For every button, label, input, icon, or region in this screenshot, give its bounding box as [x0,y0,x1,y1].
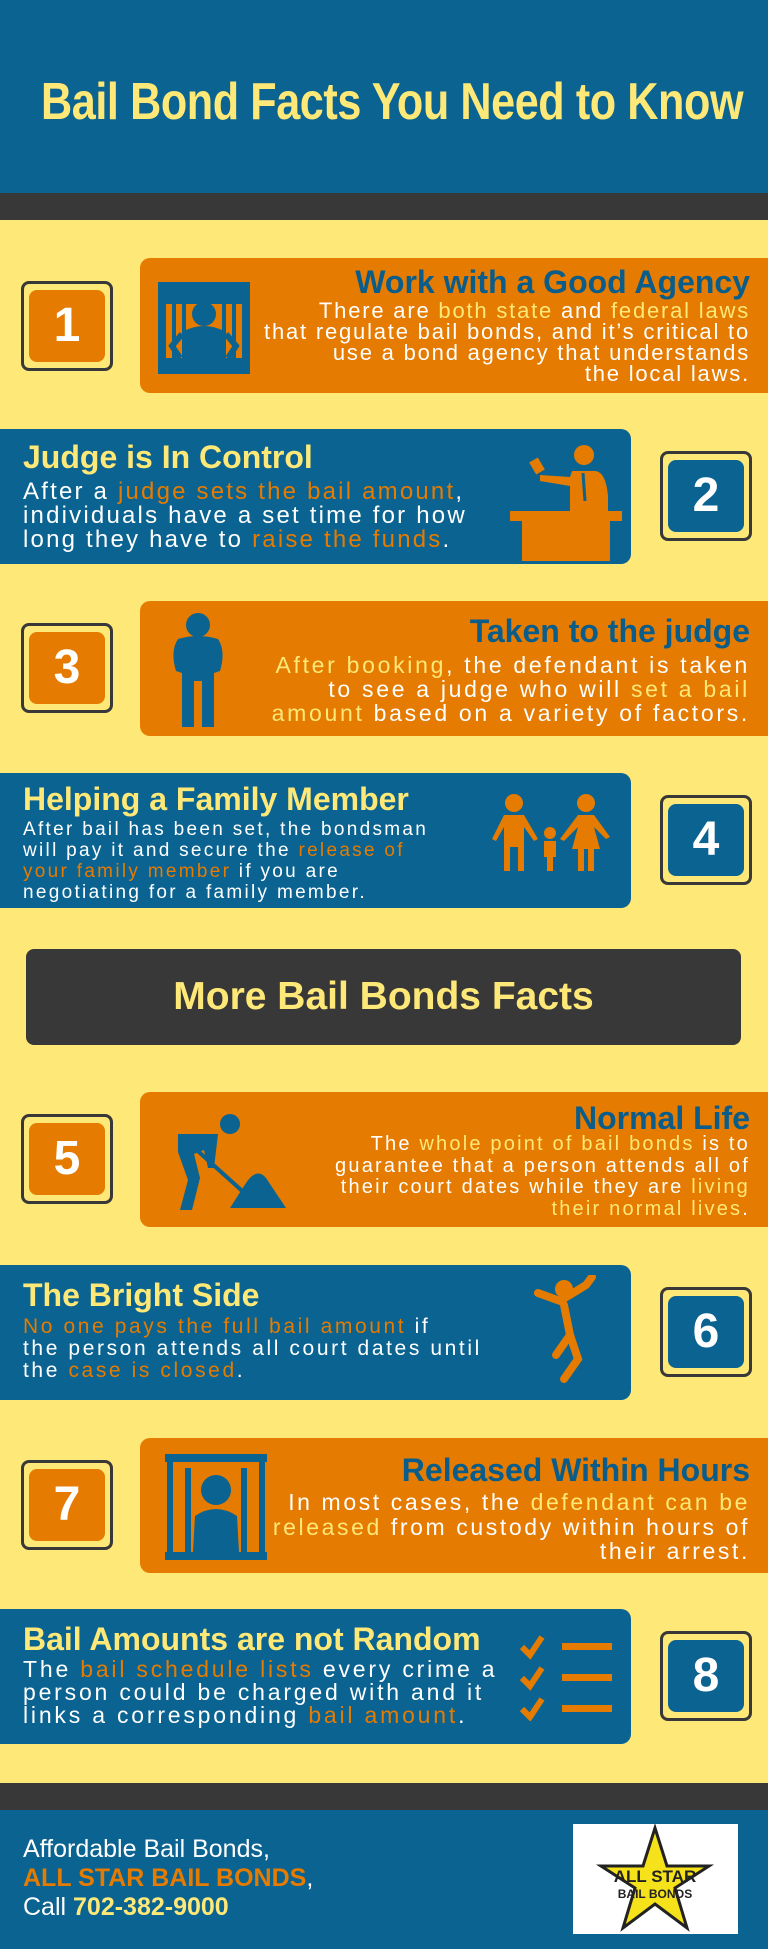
text: negotiating for a family member. [23,882,367,903]
heading: The Bright Side [23,1277,259,1313]
icon: family [492,794,610,871]
number box 7: 7 [54,1478,80,1531]
text [273,1489,750,1564]
section banner: More Bail Bonds Facts: More Bail Bonds Facts [173,975,594,1018]
number box 1 [21,281,113,371]
logo [573,1824,738,1934]
text: their arrest. [600,1538,750,1564]
number box 6 [660,1287,752,1377]
text: After a judge sets the bail amount, [23,478,464,505]
number box 5: 5 [54,1132,80,1185]
header [0,0,768,193]
text: individuals have a set time for how [23,502,467,529]
number box 6: 6 [693,1305,719,1358]
number box 3 [21,623,113,713]
text [23,1656,497,1728]
panel: fact 6 [0,1265,631,1400]
panel: fact 8 [0,1609,631,1744]
heading: Helping a Family Member [23,781,409,817]
icon: jumping person [534,1275,596,1383]
panel: fact 3 [140,601,768,736]
number box 2 [660,451,752,541]
heading: Released Within Hours [402,1452,750,1488]
footer text: Affordable Bail Bonds, [23,1835,270,1863]
number box 8 [660,1631,752,1721]
text: their normal lives. [551,1198,750,1220]
footer [0,1810,768,1949]
icon: handcuffed person [173,613,223,727]
icon: shoveling worker [178,1114,286,1210]
text: In most cases, the defendant can be [288,1489,750,1515]
text [23,478,467,553]
panel: fact 2 [0,429,631,564]
text: that regulate bail bonds, and it’s critical to [264,319,750,344]
text: released from custody within hours of [273,1514,750,1540]
text: the case is closed. [23,1359,245,1382]
text: No one pays the full bail amount if [23,1315,430,1338]
footer text: ALL STAR BAIL BONDS, [23,1864,313,1892]
text: guarantee that a person attends all of [335,1155,750,1177]
heading: Taken to the judge [470,613,750,649]
text: the person attends all court dates until [23,1337,482,1360]
number box 2: 2 [693,469,719,522]
text [264,298,750,386]
icon: judge [510,445,622,561]
heading: Work with a Good Agency [355,264,750,300]
text: After bail has been set, the bondsman [23,819,428,840]
number box 5 [21,1114,113,1204]
text: use a bond agency that understands [333,340,750,365]
text [23,819,428,903]
text: your family member if you are [23,861,340,882]
footer text: Call 702-382-9000 [23,1893,229,1921]
logo: BAIL BONDS [618,1887,692,1901]
number box 4: 4 [693,813,719,866]
text: links a corresponding bail amount. [23,1702,467,1728]
icon: prisoner behind bars [158,282,250,374]
text: their court dates while they are living [341,1176,750,1198]
text: After booking, the defendant is taken [275,652,750,678]
heading: Judge is In Control [23,439,313,475]
heading: Normal Life [574,1100,750,1136]
panel: fact 5 [140,1092,768,1227]
text: the local laws. [585,361,750,386]
icon: jail cell [165,1454,267,1560]
panel: fact 1 [140,258,768,393]
text: long they have to raise the funds. [23,526,451,553]
text: The bail schedule lists every crime a [23,1656,497,1682]
number box 1: 1 [54,299,80,352]
text: The whole point of bail bonds is to [371,1133,750,1155]
text [272,652,750,726]
number box 7 [21,1460,113,1550]
text: amount based on a variety of factors. [272,700,750,726]
footer text [23,1835,313,1921]
heading: Bail Amounts are not Random [23,1621,481,1657]
panel: fact 4 [0,773,631,908]
icon: checklist [520,1635,612,1721]
text [23,1315,482,1382]
section banner: More Bail Bonds Facts [26,949,741,1045]
text: person could be charged with and it [23,1679,484,1705]
number box 8: 8 [693,1649,719,1702]
logo: ALL STAR [614,1867,696,1886]
number box 4 [660,795,752,885]
text: to see a judge who will set a bail [328,676,750,702]
number box 3: 3 [54,641,80,694]
title: Bail Bond Facts You Need to Know [41,73,743,131]
text: There are both state and federal laws [319,298,750,323]
text [335,1133,750,1220]
panel: fact 7 [140,1438,768,1573]
text: will pay it and secure the release of [23,840,405,861]
